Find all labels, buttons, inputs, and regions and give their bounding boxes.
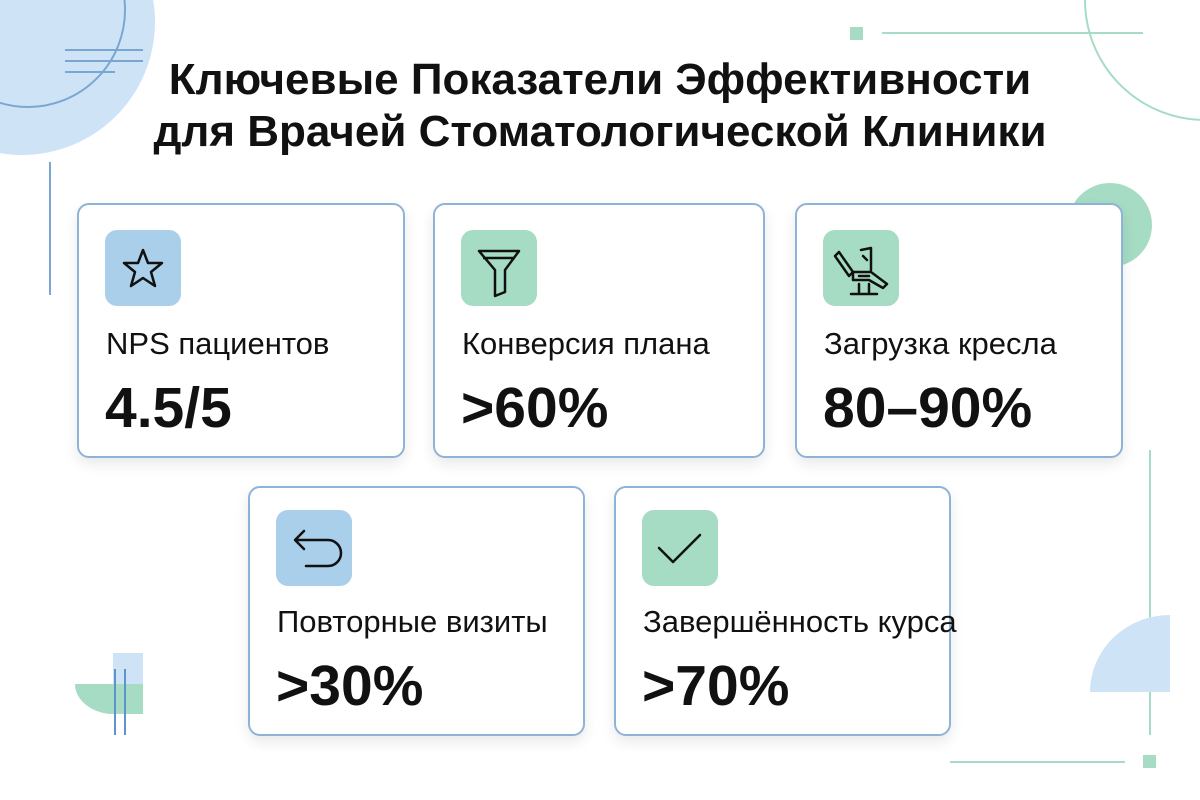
card: repeat visits xyxy=(248,486,585,736)
label: Повторные визиты xyxy=(277,604,548,639)
value: >60% xyxy=(461,376,608,440)
title xyxy=(154,55,1046,156)
label: Завершённость курса xyxy=(643,604,957,639)
icon: dental chair xyxy=(823,230,899,306)
label: Загрузка кресла xyxy=(824,326,1057,361)
value: >30% xyxy=(276,654,423,718)
icon: check xyxy=(642,510,718,586)
title: Ключевые Показатели Эффективности xyxy=(169,55,1031,104)
icon: return arrow xyxy=(276,510,352,586)
title: для Врачей Стоматологической Клиники xyxy=(154,107,1046,156)
card: NPS xyxy=(77,203,405,458)
value: 4.5/5 xyxy=(105,376,232,440)
label: NPS пациентов xyxy=(106,326,329,361)
value: >70% xyxy=(642,654,789,718)
card: conversion xyxy=(433,203,765,458)
card: course completion xyxy=(614,486,951,736)
card: chair load xyxy=(795,203,1123,458)
label: Конверсия плана xyxy=(462,326,710,361)
icon: star xyxy=(105,230,181,306)
value: 80–90% xyxy=(823,376,1032,440)
icon: funnel xyxy=(461,230,537,306)
